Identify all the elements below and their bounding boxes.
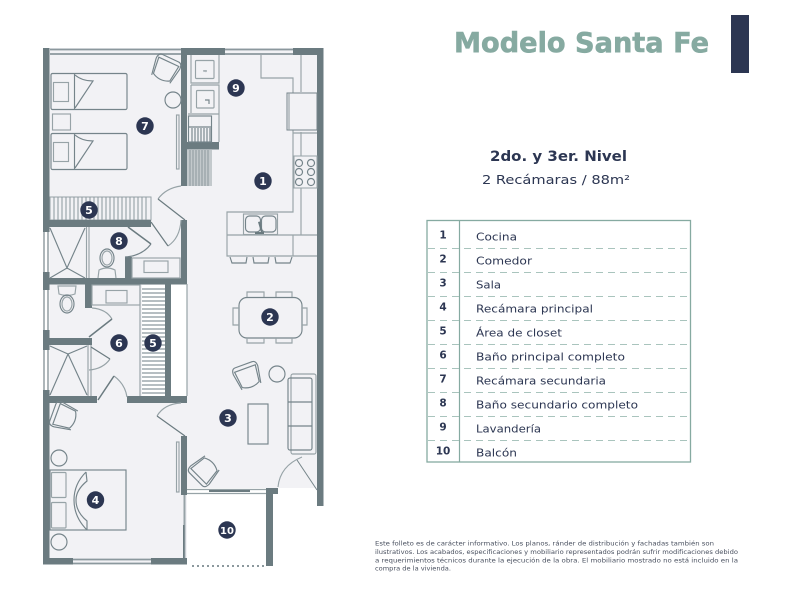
walls	[43, 48, 324, 566]
marker 6	[110, 334, 128, 352]
row 8: Baño secundario completo	[476, 398, 638, 412]
row 10: Balcón	[476, 446, 517, 460]
row 9	[439, 422, 541, 436]
row 5: 5	[439, 326, 447, 338]
marker 5 top: 5	[85, 204, 93, 217]
closet door	[168, 220, 181, 246]
door 6 upper	[92, 308, 112, 319]
door bedroom 4	[157, 403, 181, 416]
service shaft	[171, 284, 187, 396]
row 4: 4	[439, 302, 447, 314]
row 1: Cocina	[476, 230, 517, 244]
marker 4: 4	[92, 494, 100, 507]
marker 4	[87, 491, 104, 509]
level heading: 2do. y 3er. Nivel	[490, 149, 627, 165]
marker 10	[218, 521, 236, 539]
row 4: Recámara principal	[476, 302, 593, 316]
disclaimer: ilustrativos. Los acabados, especificaciones y mobiliario representados podrán sufrir modificaciones debido	[375, 548, 738, 556]
row 8	[439, 398, 638, 412]
marker 8: 8	[115, 235, 123, 248]
row 7	[439, 374, 606, 388]
shower 8	[50, 228, 85, 278]
sink	[244, 214, 278, 234]
laundry hatch	[187, 150, 212, 186]
title: Modelo Santa Fe	[454, 26, 709, 59]
floor plan	[43, 48, 324, 566]
legend table	[427, 220, 690, 462]
row 2: 2	[439, 254, 447, 266]
marker 3	[219, 409, 237, 427]
marker 5 lower: 5	[149, 337, 157, 350]
marker 5 top	[80, 201, 98, 219]
row 2	[439, 254, 533, 268]
marker 7	[136, 117, 154, 135]
armchair lower	[187, 453, 222, 488]
side table	[269, 366, 285, 382]
row 8: 8	[439, 398, 447, 410]
balcony door	[278, 457, 302, 487]
stools	[230, 257, 292, 263]
closet hatch lower	[142, 285, 165, 396]
row 1	[439, 230, 517, 244]
bed bottom	[51, 134, 127, 170]
row 2: Comedor	[476, 254, 533, 268]
row 10: 10	[436, 446, 450, 458]
marker 1	[254, 172, 272, 190]
toilet 6	[58, 286, 76, 296]
coffee table	[248, 404, 268, 444]
marker 1: 1	[259, 175, 267, 188]
fridge	[287, 93, 317, 130]
marker 8	[110, 232, 128, 250]
door entrance	[114, 376, 127, 397]
row 3: Sala	[476, 278, 501, 292]
row 5: Área de closet	[476, 326, 562, 340]
bedroom 7 furniture	[51, 53, 182, 170]
armchair	[231, 360, 264, 391]
accent bar	[731, 15, 749, 73]
vanity 6	[92, 285, 140, 305]
balcony rail and door	[183, 490, 266, 566]
marker 2	[261, 308, 279, 326]
marker 9	[227, 79, 245, 97]
floor area	[43, 48, 323, 564]
laundry appliances: ≈	[202, 68, 208, 75]
disclaimer: Este folleto es de carácter informativo. Los planos, ránder de distribución y fachadas también son	[375, 540, 714, 548]
marker 10: 10	[220, 526, 234, 537]
door 8	[125, 244, 151, 257]
row 6	[439, 350, 625, 364]
row 5	[439, 326, 562, 340]
row 7: Recámara secundaria	[476, 374, 606, 388]
door 6 lower	[89, 359, 110, 370]
row 7: 7	[439, 374, 447, 386]
nightstand	[52, 114, 70, 130]
marker 6: 6	[115, 337, 123, 350]
living furniture	[187, 360, 317, 490]
row 3: 3	[439, 278, 447, 290]
laundry appliances	[188, 55, 219, 142]
row 3	[439, 278, 501, 292]
sofa	[291, 374, 316, 454]
disclaimer	[375, 540, 738, 572]
row 9: Lavandería	[476, 422, 541, 436]
room markers	[80, 79, 279, 539]
side table	[165, 92, 181, 108]
balcony floor	[187, 488, 267, 564]
windows	[43, 50, 293, 564]
vanity 8	[132, 258, 180, 278]
bed top	[51, 74, 127, 110]
disclaimer: a requerimientos técnicos durante la ejecución de la obra. El mobiliario mostrado no está incluido en la	[375, 556, 738, 564]
chair	[149, 53, 182, 85]
row 4	[439, 302, 593, 316]
bedroom 4 furniture	[48, 400, 179, 550]
row 6: Baño principal completo	[476, 350, 625, 364]
toilet 8	[100, 249, 114, 267]
marker 7: 7	[141, 120, 149, 133]
dining table	[233, 292, 307, 343]
closet hatch top	[50, 197, 151, 220]
marker 9: 9	[232, 82, 240, 95]
table frame	[427, 220, 690, 462]
marker 3: 3	[224, 412, 232, 425]
row 10	[436, 446, 517, 460]
marker 2: 2	[266, 311, 274, 324]
disclaimer: compra de la vivienda.	[375, 566, 451, 572]
bath and closet fixtures	[50, 186, 185, 436]
stove	[294, 156, 317, 188]
size subtitle: 2 Recámaras / 88m²	[482, 172, 630, 187]
kitchen counters	[227, 55, 317, 263]
row 6: 6	[439, 350, 447, 362]
row 1: 1	[439, 230, 447, 242]
row 9: 9	[439, 422, 447, 434]
closet door	[176, 115, 179, 169]
marker 5 lower	[144, 334, 162, 352]
shower 6	[50, 346, 87, 395]
door bedroom 7	[158, 186, 181, 199]
